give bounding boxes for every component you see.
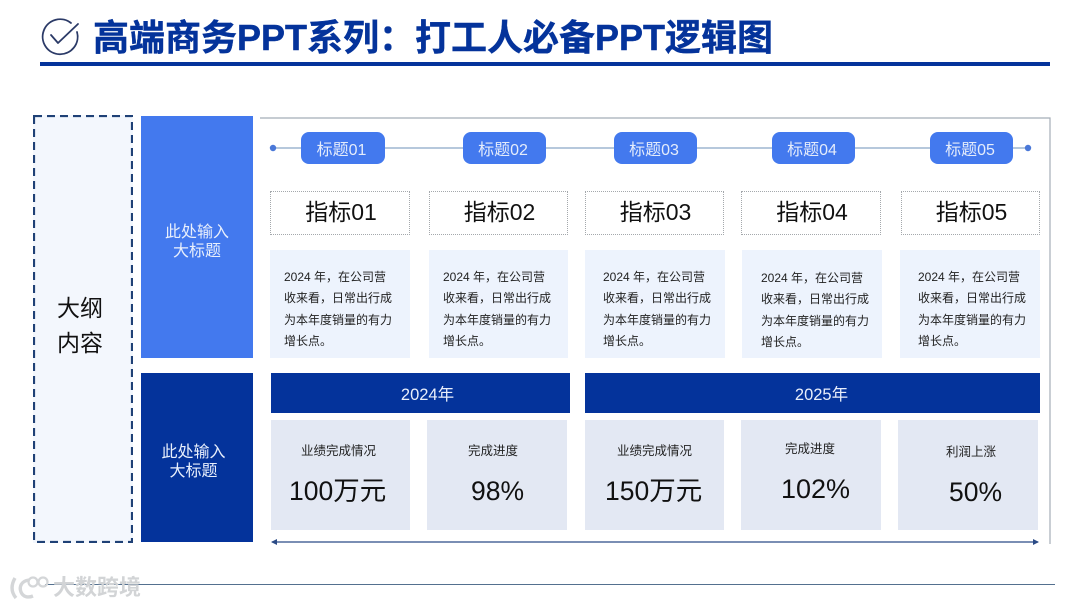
card: 完成进度 98%: 完成进度	[468, 444, 518, 458]
text block 01: 2024 年，在公司营	[284, 270, 386, 284]
panel: upper heading: 大标题	[173, 242, 221, 260]
indicator 05	[901, 191, 1040, 235]
card: 业绩完成情况 100万元: 100万元	[289, 476, 386, 506]
text block 04: 2024 年，在公司营	[761, 271, 863, 285]
indicator 02: 指标02	[464, 199, 535, 225]
year bar 2024: 2024年	[401, 386, 454, 404]
text block 01	[270, 250, 410, 358]
text block 01: 增长点。	[284, 334, 332, 348]
indicator 01: 指标01	[305, 199, 377, 225]
text block 05: 2024 年，在公司营	[918, 270, 1020, 284]
pill: 标题02	[463, 132, 546, 164]
indicator 04: 指标04	[776, 199, 848, 225]
card: 业绩完成情况 150万元	[585, 420, 724, 530]
pill: 标题04: 标题04	[787, 142, 837, 159]
card: 业绩完成情况 100万元	[271, 420, 410, 530]
text block 04	[742, 250, 882, 358]
indicator 02	[429, 191, 568, 235]
pill: 标题02: 标题02	[478, 142, 528, 159]
text block 01: 收来看，日常出行成	[284, 291, 392, 305]
text block 05: 增长点。	[918, 334, 966, 348]
card: 利润上涨 50%	[898, 420, 1038, 530]
indicator 03	[585, 191, 724, 235]
pill: 标题03: 标题03	[629, 142, 679, 159]
icon: watermark logo	[10, 576, 48, 599]
icon: check circle	[42, 18, 79, 56]
panel: lower heading: 大标题	[169, 462, 218, 480]
text block 02: 增长点。	[443, 334, 491, 348]
indicator 01	[270, 191, 410, 235]
text block 04: 收来看，日常出行成	[761, 292, 869, 306]
text block 02: 为本年度销量的有力	[443, 313, 551, 327]
card: 完成进度 98%	[427, 420, 567, 530]
year bar 2025: 2025年	[795, 386, 848, 404]
indicator 04	[741, 191, 881, 235]
text block 03: 2024 年，在公司营	[603, 270, 705, 284]
card: 业绩完成情况 150万元: 业绩完成情况	[617, 444, 692, 458]
text block 05: 收来看，日常出行成	[918, 291, 1026, 305]
card: 完成进度 102%: 102%	[781, 474, 850, 504]
year bar 2024	[271, 373, 570, 413]
text block 04: 增长点。	[761, 335, 809, 349]
panel: upper heading: 此处输入	[165, 224, 229, 240]
pill: 标题03	[614, 132, 697, 164]
text block 03: 为本年度销量的有力	[603, 313, 711, 327]
watermark text: 大数跨境	[53, 575, 141, 600]
card: 完成进度 102%	[741, 420, 881, 530]
text block 03: 收来看，日常出行成	[603, 291, 711, 305]
footer line	[45, 584, 1055, 585]
timeline	[270, 144, 1032, 152]
panel: lower heading: 此处输入	[161, 444, 226, 460]
card: 业绩完成情况 150万元: 150万元	[605, 476, 702, 506]
title: 高端商务PPT系列：打工人必备PPT逻辑图	[93, 17, 773, 58]
panel: upper heading	[141, 116, 253, 358]
text block 02: 2024 年，在公司营	[443, 270, 545, 284]
card: 利润上涨 50%: 利润上涨	[946, 445, 996, 459]
pill: 标题05	[930, 132, 1013, 164]
pill: 标题01	[301, 132, 385, 164]
text block 03	[585, 250, 725, 358]
panel border: dashed	[33, 115, 133, 543]
text block 05: 为本年度销量的有力	[918, 313, 1026, 327]
pill: 标题01: 标题01	[317, 142, 366, 159]
card: 业绩完成情况 100万元: 业绩完成情况	[301, 444, 376, 458]
panel: lower heading	[141, 373, 253, 542]
text block 05	[900, 250, 1040, 358]
year bar 2025	[585, 373, 1040, 413]
text block 02	[429, 250, 568, 358]
card: 完成进度 102%: 完成进度	[785, 442, 835, 456]
text block 03: 增长点。	[603, 334, 651, 348]
arrow: double-headed span	[271, 539, 1039, 545]
text block 04: 为本年度销量的有力	[761, 314, 869, 328]
text block 01: 为本年度销量的有力	[284, 313, 392, 327]
title underline	[40, 62, 1050, 66]
panel: outline: 大纲	[57, 295, 103, 321]
panel: outline: 内容	[57, 330, 103, 356]
pill: 标题04	[772, 132, 855, 164]
frame lines	[260, 117, 1051, 544]
card: 利润上涨 50%: 50%	[949, 477, 1002, 507]
panel: outline	[33, 115, 133, 543]
indicator 03: 指标03	[620, 199, 691, 225]
watermark	[10, 575, 141, 600]
pill: 标题05: 标题05	[945, 142, 995, 159]
indicator 05: 指标05	[936, 199, 1007, 225]
card: 完成进度 98%: 98%	[471, 476, 524, 506]
text block 02: 收来看，日常出行成	[443, 291, 551, 305]
